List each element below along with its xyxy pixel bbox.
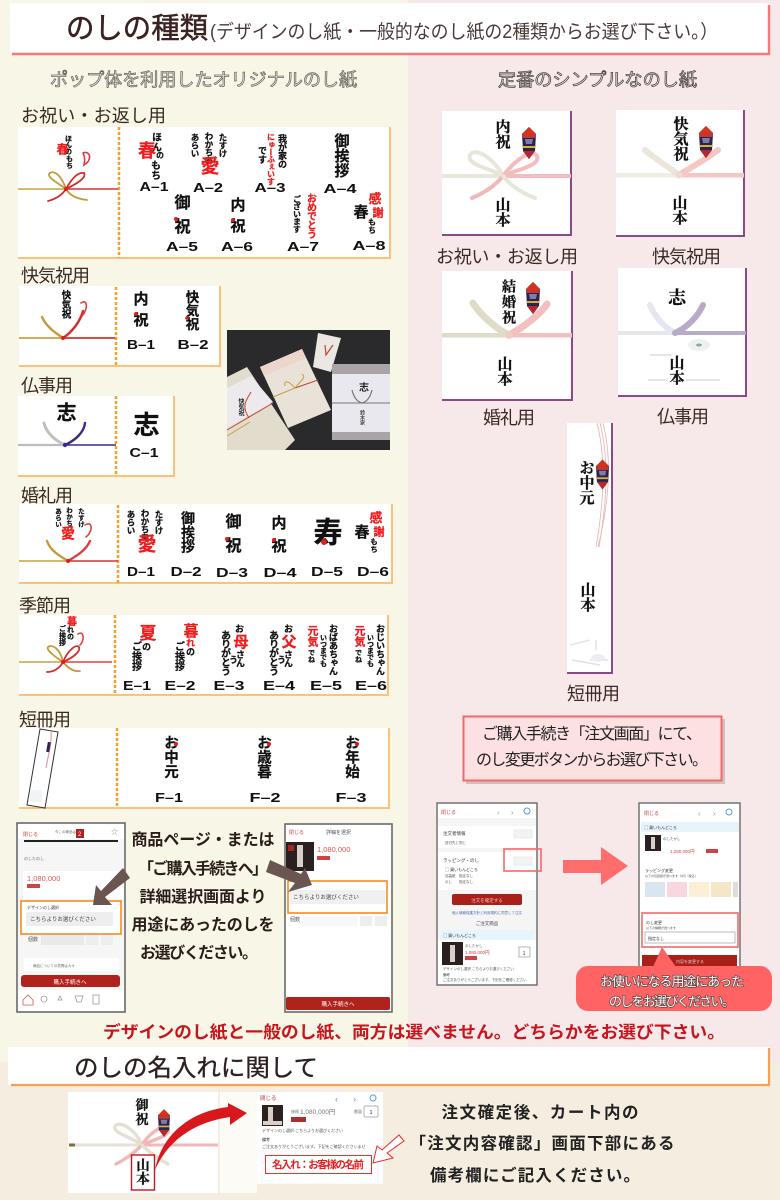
design D-1: わかちあ	[140, 509, 150, 541]
design F-2	[250, 735, 280, 805]
phone screenshot: product page: ☆	[111, 827, 118, 836]
phone fragment: remarks field: デザインのし選択:こちらよりお選びください	[262, 1127, 343, 1133]
phone screenshot: order screen: 備考	[443, 972, 450, 977]
design A-8	[352, 191, 386, 253]
design E-2: の	[185, 647, 195, 656]
instruction text: where to choose: お選びください。	[140, 944, 258, 962]
sample tanzaku strip	[27, 729, 58, 808]
sample noshi C: 志	[53, 402, 76, 422]
design D-4: 祝	[270, 538, 286, 554]
sample noshi E: れの	[66, 626, 74, 640]
callout: order screen	[464, 716, 725, 784]
phone screenshot: change form: ラッピング変更	[645, 867, 673, 873]
design E-4: 父	[280, 634, 296, 649]
simple noshi: wedding: 山本	[494, 356, 516, 386]
design E-6: おじいちゃん	[375, 624, 385, 676]
sample noshi E: 暮	[64, 615, 76, 627]
design F-1: F–1	[155, 790, 183, 805]
phone screenshot: order screen: 注文を確定する	[471, 897, 503, 904]
design A-1	[136, 132, 168, 194]
phone screenshot: order screen: のし 指定なし	[445, 879, 473, 884]
phone screenshot: details select	[285, 824, 392, 1012]
design E-3: E–3	[214, 678, 244, 693]
design D-3: 御	[222, 513, 242, 530]
instruction text: name entry: 注文確定後、カート内の	[442, 1102, 638, 1122]
design D-6: 春	[352, 523, 370, 539]
design B-1	[127, 291, 155, 352]
phone screenshot: details select: こちらよりお選びください	[293, 893, 359, 901]
design E-4: う	[276, 655, 286, 664]
design E-5	[306, 624, 342, 693]
design A-3: A–3	[254, 180, 286, 195]
simple noshi: wedding: 結婚祝	[499, 278, 519, 326]
design E-2: E–2	[164, 678, 196, 693]
noshi sample with name: 御祝	[132, 1097, 152, 1127]
phone screenshot: product page: 個数	[28, 936, 38, 943]
phone screenshot: order screen: ▢ 買いもんどころ	[445, 866, 478, 872]
design A-3: です	[257, 146, 267, 164]
phone fragment: remarks field: 価格	[291, 1108, 299, 1114]
phone screenshot: change form: ›	[713, 811, 716, 818]
phone screenshot: order screen: 閉じる	[441, 810, 456, 816]
sample noshi D	[19, 507, 118, 563]
phone screenshot: product page: 今この商品は	[55, 829, 76, 834]
phone screenshot: product page: デザインのし選択	[27, 904, 59, 910]
sample noshi A	[18, 135, 118, 201]
design A-7: ございます	[292, 194, 302, 233]
design F-3: お年始	[343, 735, 359, 780]
sample noshi B: 快気祝	[60, 289, 71, 319]
instruction text: where to choose: 用途にあったのしを	[132, 916, 274, 934]
phone screenshot: order screen: ラッピング・のし	[443, 857, 479, 864]
design A-5	[166, 194, 198, 254]
red name box: 山本	[133, 1158, 153, 1186]
noshi sample with name	[68, 1092, 257, 1193]
sample noshi E	[19, 615, 112, 672]
design D-5: D–5	[311, 564, 343, 579]
simple noshi: celebration: 山本	[492, 197, 514, 227]
heading: name printing: のしの名入れに関して	[74, 1055, 318, 1082]
simple noshi: recovery label: 快気祝用	[652, 247, 721, 267]
sample noshi C	[18, 402, 116, 447]
design D-6: もち	[370, 538, 378, 554]
design E-2	[164, 623, 198, 693]
simple noshi: buddhist label: 仏事用	[657, 407, 709, 427]
simple noshi: tanzaku: 山本	[578, 582, 598, 612]
arrow: curved red	[155, 1103, 247, 1170]
title banner	[10, 3, 770, 54]
red name box	[132, 1155, 154, 1190]
design A-3: 我が家の	[277, 133, 287, 168]
simple noshi: celebration label: お祝い・お返し用	[436, 247, 578, 267]
phone fragment: remarks field: ‹	[335, 1094, 338, 1104]
phone screenshot: product page: 1,080,000	[27, 874, 60, 883]
sample noshi A: 春	[55, 142, 69, 156]
design A-8: 感	[366, 191, 382, 205]
design D-2: 御挨拶	[180, 510, 196, 554]
red name entry box: 名入れ：お客様の名前	[272, 1158, 364, 1171]
design E-4: E–4	[263, 678, 296, 693]
phone fragment: remarks field: 備考	[262, 1136, 270, 1142]
simple noshi: tanzaku label: 短冊用	[567, 684, 620, 704]
design D-6	[352, 510, 389, 579]
title: のしの種類	[66, 12, 208, 45]
design D-1: D–1	[127, 564, 155, 579]
design F-1	[155, 735, 183, 805]
design D-5: 寿	[309, 517, 342, 546]
design E-3: ありがとう	[218, 630, 230, 676]
sample noshi A: ほんの	[64, 135, 72, 155]
phone screenshot: details select: 個数	[290, 916, 300, 923]
design E-5: いつまでも	[320, 634, 327, 667]
phone screenshot: order screen: 個人情報保護方針と利用規約に同意して注文	[452, 910, 522, 915]
phone screenshot: order screen: 送付先と同じ	[445, 840, 466, 845]
design E-1	[123, 624, 156, 693]
design F-3	[336, 735, 366, 805]
design E-4: お	[283, 624, 293, 633]
design B-2: 快気祝	[184, 290, 199, 332]
sample noshi A: もち	[66, 155, 73, 170]
design E-3: 母	[232, 634, 248, 650]
design D-3: D–3	[216, 565, 248, 580]
phone screenshot: change form: 以下の包装紙が選べます（0円（税込）	[645, 873, 698, 878]
design D-2: D–2	[170, 564, 202, 579]
design D-6: 謝	[372, 525, 384, 538]
category label: seasonal: 季節用	[19, 596, 71, 616]
design D-6: D–6	[357, 564, 389, 579]
sample noshi D: あらい	[54, 508, 62, 528]
design E-1: ご挨拶	[130, 640, 142, 672]
category label: celebration: お祝い・お返し用	[21, 106, 166, 126]
design A-2: わかちあ	[204, 132, 214, 164]
panel: B designs	[19, 286, 220, 366]
design F-1: お中元	[162, 735, 178, 779]
sample noshi E: ご挨拶	[58, 624, 66, 647]
phone screenshot: order screen: ご注文商品	[476, 920, 499, 927]
instruction text: name entry	[410, 1102, 674, 1185]
arrow: small outlined	[373, 1135, 404, 1163]
phone screenshot: product page: こちらよりお選びください	[30, 915, 96, 923]
design E-5: でね	[308, 649, 315, 663]
sample noshi D: わかち	[64, 507, 73, 528]
phone screenshot: order screen: のしたかし	[465, 943, 483, 948]
photo: wrapped gift boxes	[227, 330, 390, 450]
phone screenshot: order screen: 注文者情報	[443, 830, 466, 837]
design E-1: E–1	[123, 678, 151, 693]
design D-4: 内	[270, 515, 286, 531]
instruction text: where to choose: 商品ページ・または	[132, 831, 274, 849]
design E-2: 暮	[182, 623, 198, 639]
design D-3: 祝	[222, 537, 242, 554]
design E-6: E–6	[355, 678, 387, 693]
design A-2: たすけ	[218, 133, 228, 158]
design A-7: おめでとう	[304, 193, 316, 239]
design A-2	[190, 132, 228, 195]
callout: select by use	[576, 947, 772, 1011]
arrow: to right phone	[266, 860, 312, 892]
photo: wrapped gift boxes: 志	[356, 381, 368, 392]
design A-4	[324, 132, 358, 196]
design E-6	[353, 624, 387, 693]
design E-6: いつまでも	[366, 634, 374, 667]
design D-4: D–4	[264, 565, 298, 580]
instruction text: name entry: 備考欄にご記入ください。	[430, 1165, 640, 1185]
panel: A designs	[18, 127, 391, 258]
category label: tanzaku: 短冊用	[19, 710, 71, 730]
simple noshi: buddhist: 志	[664, 288, 690, 306]
design A-8: もち	[368, 218, 376, 235]
sample noshi D: たすけ	[76, 508, 85, 529]
design D-4	[264, 515, 298, 580]
phone screenshot: change form: のしたかし	[663, 836, 681, 841]
phone screenshot: order screen: デザインのし選択 こちらよりお選びください	[443, 966, 514, 971]
design F-3: F–3	[336, 790, 366, 805]
phone screenshot: order screen: 1	[523, 951, 526, 957]
phone fragment: remarks field: 数量	[354, 1108, 362, 1114]
phone screenshot: details select: 1,080,000	[317, 845, 350, 854]
phone fragment: remarks field	[257, 1092, 383, 1184]
instruction text: where to choose	[132, 831, 274, 962]
panel: D designs	[19, 504, 392, 583]
warning text: デザインのし紙と一般のし紙、両方は選べません。どちらかをお選び下さい。	[103, 1022, 725, 1042]
category label: wedding: 婚礼用	[21, 486, 73, 506]
phone fragment: remarks field: 閉じる	[260, 1095, 277, 1102]
design E-3: う	[228, 655, 238, 664]
design B-2	[178, 290, 208, 352]
background: bottom beige panel	[0, 1062, 780, 1200]
design A-2: あらい	[190, 133, 200, 157]
sample noshi D: 愛	[60, 525, 76, 541]
phone screenshot: change form: ▢ 買いもんどころ	[644, 824, 677, 830]
phone screenshot: product page: 商品についての質問はカオ	[33, 963, 75, 968]
design E-2: れ	[185, 638, 195, 647]
design B-2: B–2	[178, 337, 208, 352]
design A-6: 祝	[228, 218, 246, 234]
design D-1: あらい	[126, 510, 136, 534]
design E-4: ありがとう	[266, 630, 278, 676]
panel: F designs	[19, 728, 389, 808]
category label: buddhist: 仏事用	[21, 376, 73, 396]
design A-6: A–6	[221, 239, 253, 254]
simple noshi: buddhist	[618, 268, 747, 397]
phone screenshot: change form: 以下の種類が選べます	[646, 925, 676, 930]
design E-6: でね	[354, 649, 362, 663]
design E-1: 夏	[136, 624, 156, 641]
design A-1: の	[156, 151, 164, 159]
instruction text: where to choose: 「ご購入手続きへ」	[138, 859, 268, 878]
simple noshi: celebration	[442, 111, 572, 236]
design A-1: 春	[136, 141, 156, 159]
design B-1: 祝	[132, 312, 148, 328]
photo: wrapped gift boxes: 鈴木家	[359, 409, 365, 425]
design E-3	[214, 624, 248, 693]
design A-8: A–8	[352, 238, 386, 253]
instruction text: name entry: 「注文内容確認」画面下部にある	[410, 1133, 674, 1153]
callout: order screen: ご購入手続き「注文画面」にて、	[482, 725, 702, 743]
design E-5: おばあちゃん	[328, 624, 338, 676]
phone screenshot: order screen: ▢ 買いもんどころ	[443, 932, 476, 938]
instruction text: where to choose: 詳細選択画面より	[140, 887, 266, 906]
design E-2: ご挨拶	[172, 640, 184, 672]
simple noshi: recovery: 山本	[670, 195, 690, 225]
design A-5: 御	[172, 194, 190, 211]
phone screenshot: order screen	[437, 803, 541, 985]
design D-3	[216, 513, 248, 580]
design E-4	[263, 624, 296, 693]
design A-7: A–7	[287, 239, 319, 254]
design E-3: お	[234, 624, 244, 633]
design A-2: A–2	[193, 180, 223, 195]
design A-1: A–1	[140, 179, 168, 194]
phone fragment: remarks field: ›	[353, 1094, 356, 1104]
phone screenshot: change form	[639, 803, 740, 993]
phone screenshot: order screen: 1,080,000円	[465, 950, 490, 956]
subtitle: (デザインのし紙・一般的なのし紙の2種類からお選び下さい。）	[210, 21, 718, 43]
banner: name printing	[8, 1047, 770, 1085]
phone screenshot: order screen: ‹	[497, 810, 500, 817]
design A-3	[254, 133, 287, 195]
design F-2: F–2	[250, 790, 280, 805]
design E-5: 元気	[306, 625, 318, 648]
simple noshi: wedding	[442, 271, 573, 401]
photo: wrapped gift boxes: 快気祝	[237, 397, 244, 417]
phone screenshot: change form: 内容を変更する	[676, 958, 704, 964]
phone screenshot: change form: のし変更	[646, 919, 662, 925]
phone screenshot: order screen: ›	[511, 810, 514, 817]
design A-5: A–5	[166, 239, 198, 254]
phone fragment: remarks field: 1,080,000円	[300, 1108, 335, 1116]
phone screenshot: product page: のしたのし	[24, 855, 44, 861]
phone fragment: remarks field: ご注文ありがとうございます。下記をご確認くださいませ	[262, 1143, 365, 1149]
phone fragment: remarks field: 1	[369, 1110, 373, 1116]
design D-1: 愛	[134, 534, 156, 553]
design E-5: E–5	[310, 678, 342, 693]
design F-2: お歳暮	[255, 735, 271, 780]
phone screenshot: order screen: 包装紙 指定なし	[445, 873, 473, 878]
category label: recovery: 快気祝用	[21, 266, 90, 286]
phone screenshot: product page: 購入手続きへ	[53, 978, 87, 986]
phone screenshot: change form: 閉じる	[644, 811, 659, 817]
design C-1: C–1	[130, 445, 158, 460]
simple noshi: recovery: 快気祝	[670, 115, 692, 161]
panel: C designs	[18, 396, 174, 476]
design C-1: 志	[130, 411, 160, 437]
phone screenshot: details select: 購入手続きへ	[321, 1000, 355, 1008]
design D-1: たすけ	[154, 510, 164, 535]
design B-1: 内	[132, 291, 148, 307]
phone screenshot: product page: 2	[78, 832, 82, 838]
design E-6: 元気	[353, 625, 366, 648]
design A-4: 御挨拶	[332, 132, 350, 179]
phone screenshot: change form: 指定なし	[648, 935, 664, 941]
heading: simple noshi: 定番のシンプルなのし紙	[498, 70, 697, 90]
design A-3: にゅーふぇいす	[266, 133, 276, 185]
callout: select by use: お使いになる用途にあった	[600, 974, 744, 989]
design A-6	[221, 197, 253, 254]
simple noshi: tanzaku: お中元	[576, 460, 598, 506]
arrow: to left phone	[93, 868, 130, 905]
design C-1	[130, 411, 160, 460]
design A-1: もち	[148, 160, 160, 180]
simple noshi: celebration: 内祝	[492, 118, 514, 149]
design B-1: B–1	[127, 337, 155, 352]
design E-3: さん	[235, 650, 245, 668]
background: right pink panel	[408, 0, 780, 1062]
design A-2: 愛	[198, 156, 219, 175]
simple noshi: tanzaku	[567, 423, 613, 674]
design D-6: 感	[368, 510, 382, 524]
design D-5	[309, 517, 343, 579]
callout: order screen: のし変更ボタンからお選び下さい。	[476, 751, 708, 769]
simple noshi: buddhist: 山本	[666, 355, 688, 385]
callout: select by use: のしをお選びください。	[609, 994, 735, 1009]
simple noshi: recovery	[616, 110, 745, 237]
sample noshi B	[19, 289, 115, 340]
design E-1: の	[141, 642, 151, 651]
phone screenshot: change form: 1,280,000円	[670, 849, 695, 855]
design D-1	[126, 509, 164, 579]
phone screenshot: order screen: ご注文ありがとうございます。下記をご確認ください	[443, 977, 527, 982]
phone screenshot: product page	[17, 823, 125, 1012]
simple noshi: wedding label: 婚礼用	[483, 408, 535, 428]
heading: pop style noshi: ポップ体を利用したオリジナルのし紙	[50, 70, 357, 90]
phone screenshot: details select: 詳細を選択	[326, 829, 351, 836]
design A-5: 祝	[172, 218, 190, 235]
design A-6: 内	[228, 197, 246, 213]
design D-2	[170, 510, 202, 579]
phone screenshot: product page: 閉じる	[23, 832, 38, 838]
design A-8: 春	[352, 203, 368, 219]
phone screenshot: details select: 閉じる	[289, 830, 304, 836]
background: left cream panel	[0, 0, 408, 1062]
design A-4: A–4	[324, 181, 358, 196]
phone screenshot: change form: ‹	[698, 811, 701, 818]
arrow: pink right	[563, 847, 628, 885]
panel: E designs	[19, 615, 388, 695]
design A-8: 謝	[371, 206, 384, 219]
design A-1: ほん	[150, 132, 162, 152]
design A-7	[287, 193, 319, 254]
design E-4: さん	[283, 650, 293, 668]
